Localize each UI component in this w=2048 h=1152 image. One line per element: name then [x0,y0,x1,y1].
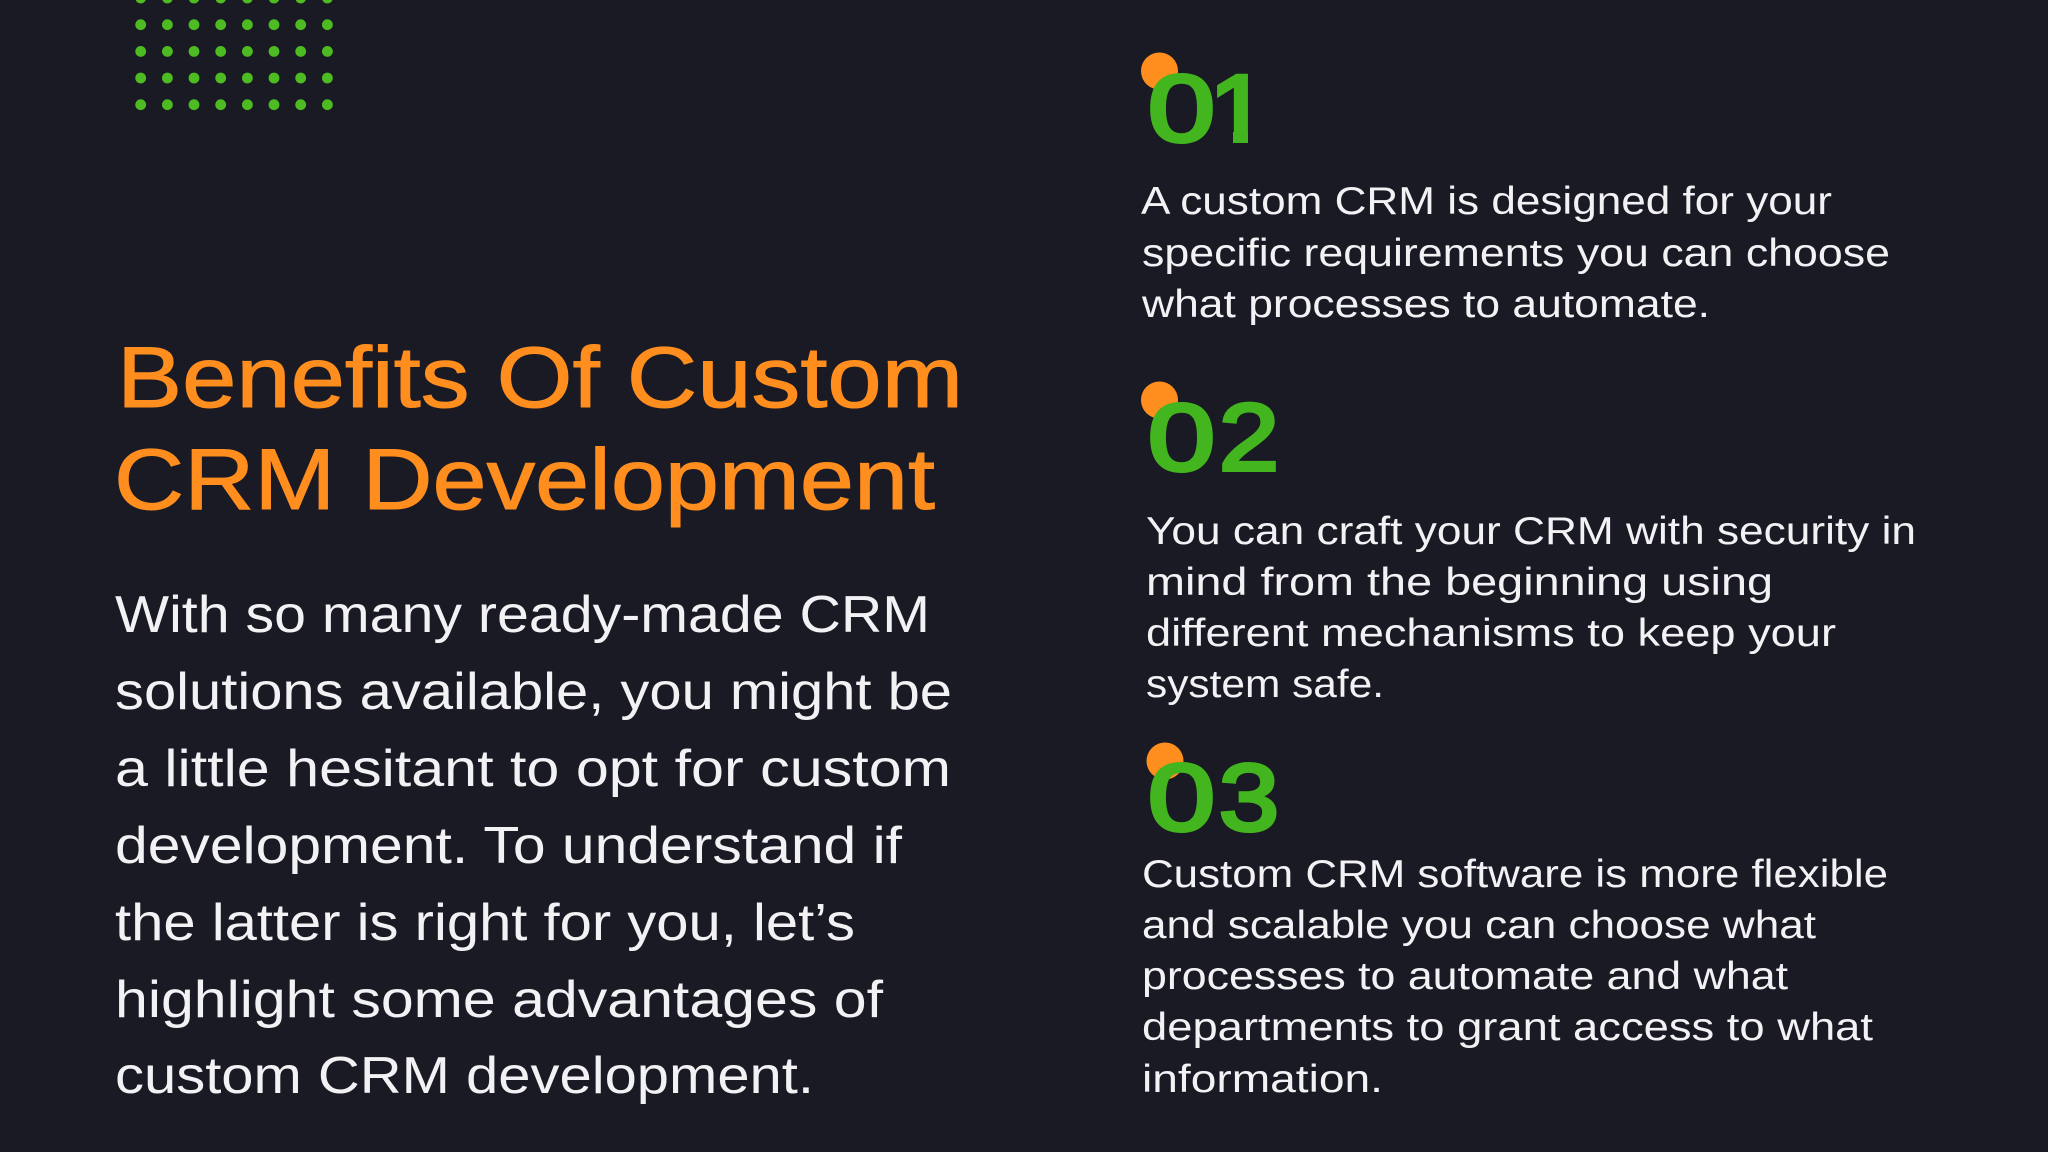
benefit 01 text [1141,180,1890,326]
benefit 02 text: system safe. [1146,663,1384,706]
benefit 03 text: and scalable you can choose what [1142,904,1816,947]
number 03 [1148,745,1279,851]
benefit 02 text: You can craft your CRM with security in [1146,510,1916,553]
benefit 02 text: different mechanisms to keep your [1146,612,1836,655]
intro paragraph: With so many ready-made CRM [115,586,930,644]
benefit 03 [1142,742,1888,1101]
benefit 02 text: mind from the beginning using [1146,561,1773,604]
benefit 01 text: what processes to automate. [1141,283,1710,326]
number 01: 1 [1209,56,1269,162]
title [114,330,963,528]
intro paragraph: development. To understand if [115,817,903,875]
benefit 03 text: Custom CRM software is more flexible [1142,853,1888,896]
number 03: 0 [1148,745,1215,851]
benefit 03 text: processes to automate and what [1142,955,1788,998]
decorative green dot grid [135,0,333,110]
title: CRM Development [114,432,935,528]
intro paragraph: the latter is right for you, let’s [115,894,855,952]
number 01 [1150,73,1248,144]
intro paragraph [115,586,952,1105]
benefit 02 [1141,382,1916,706]
title: Benefits Of Custom [117,330,963,426]
intro paragraph: solutions available, you might be [115,663,952,721]
benefit 03 text: departments to grant access to what [1142,1006,1873,1049]
number 02 [1148,385,1279,491]
intro paragraph: custom CRM development. [115,1047,814,1105]
number 03: 3 [1219,745,1279,851]
benefit 01 text: A custom CRM is designed for your [1141,180,1832,223]
orange dot 01 [1141,52,1178,90]
benefit 03 text [1142,853,1888,1101]
intro paragraph: a little hesitant to opt for custom [115,740,951,798]
orange dot 03 [1146,742,1184,780]
benefit 03 text: information. [1142,1058,1383,1101]
benefit 01 [1141,52,1890,326]
benefit 01 text: specific requirements you can choose [1142,232,1890,275]
number 02: 2 [1219,385,1279,491]
intro paragraph: highlight some advantages of [115,971,884,1029]
number 01: 0 [1148,56,1215,162]
benefit 02 text [1146,510,1916,706]
orange dot 02 [1141,382,1178,418]
number 02: 0 [1148,385,1215,491]
